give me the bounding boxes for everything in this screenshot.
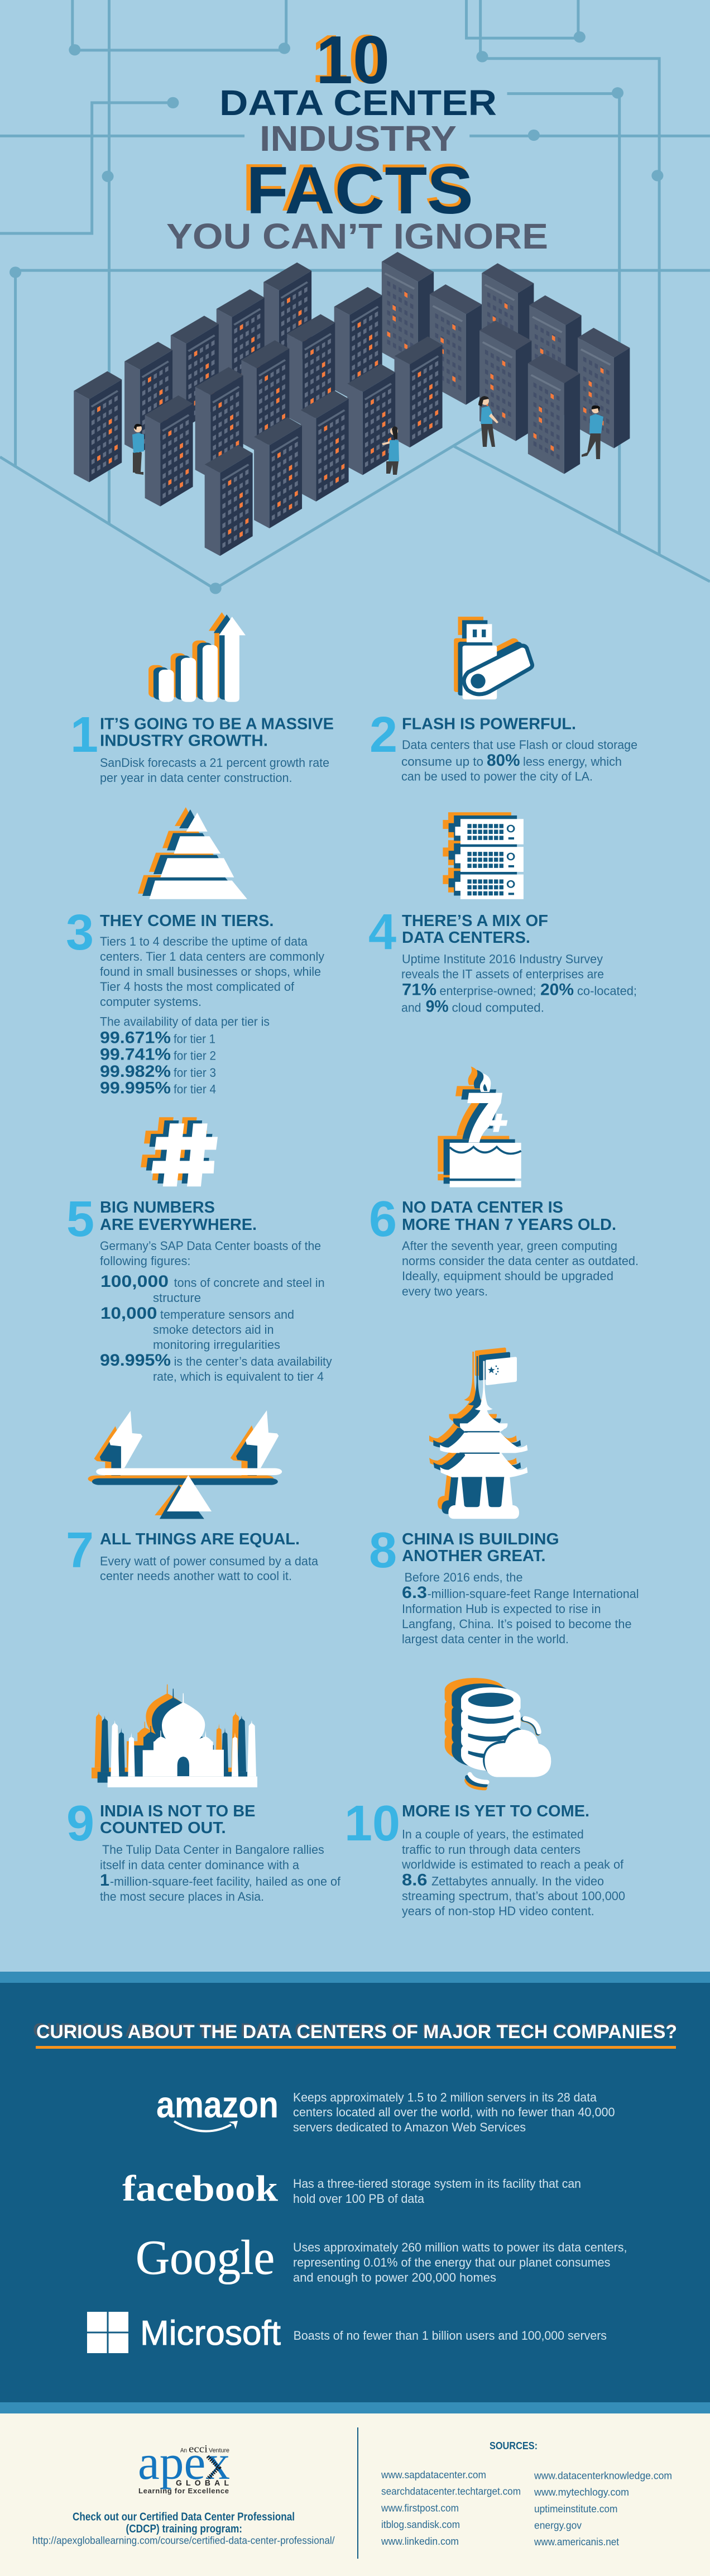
title: 10: 10 bbox=[311, 21, 385, 97]
amazon text bbox=[293, 2090, 615, 2134]
fact 9 bbox=[66, 1685, 341, 1904]
call to action bbox=[32, 2511, 335, 2546]
heading 1: INDUSTRY GROWTH. bbox=[100, 732, 268, 750]
body 4: enterprise-owned; bbox=[440, 984, 536, 998]
heading 6 bbox=[402, 1199, 616, 1234]
heading 2: FLASH IS POWERFUL. bbox=[402, 715, 576, 733]
heading 1: IT’S GOING TO BE A MASSIVE bbox=[100, 715, 334, 733]
number 9: 9 bbox=[66, 1796, 94, 1852]
logo: apex global: Learning for Excellence bbox=[138, 2487, 229, 2495]
title: industry: INDUSTRY bbox=[260, 118, 457, 159]
body 2: can be used to power the city of LA. bbox=[401, 770, 593, 783]
fact 10 bbox=[344, 1678, 625, 1918]
body 5: structure bbox=[153, 1291, 201, 1305]
number 10: 10 bbox=[344, 1796, 400, 1852]
body 10: Zettabytes annually. In the video bbox=[431, 1874, 604, 1888]
body 4: Uptime Institute 2016 Industry Survey bbox=[402, 952, 603, 966]
tier availability figures: for tier 4 bbox=[174, 1082, 216, 1096]
heading 8 bbox=[402, 1530, 559, 1565]
call to action: http://apexgloballearning.com/course/certified-data-center-professional/ bbox=[32, 2535, 335, 2546]
body 8 bbox=[402, 1571, 639, 1646]
title: data center: DATA CENTER bbox=[219, 83, 497, 123]
body 7: center needs another watt to cool it. bbox=[100, 1569, 292, 1583]
body 6: every two years. bbox=[402, 1285, 488, 1298]
body 3: found in small businesses or shops, while bbox=[100, 965, 321, 979]
fact 7 bbox=[66, 1410, 319, 1583]
body 8: Information Hub is expected to rise in bbox=[402, 1602, 601, 1616]
logo: apex global: ecci bbox=[189, 2443, 208, 2455]
body 2: Data centers that use Flash or cloud storage bbox=[402, 738, 637, 752]
tier availability figures: for tier 2 bbox=[174, 1048, 216, 1062]
body 9: The Tulip Data Center in Bangalore rallies bbox=[102, 1843, 324, 1857]
body 3: The availability of data per tier is bbox=[100, 1014, 270, 1029]
body 10: traffic to run through data centers bbox=[402, 1843, 581, 1857]
logo: google: Google bbox=[136, 2231, 275, 2285]
body 4: 9% bbox=[426, 997, 449, 1015]
sources list: left bbox=[381, 2469, 521, 2547]
icon: taj mahal bbox=[92, 1685, 257, 1787]
number 1: 1 bbox=[70, 707, 98, 763]
logo: amazon: amazon bbox=[156, 2084, 279, 2126]
call to action: (CDCP) training program: bbox=[126, 2523, 242, 2535]
heading 8: CHINA IS BUILDING bbox=[402, 1530, 559, 1548]
heading 4: THERE’S A MIX OF bbox=[402, 912, 548, 930]
number 3: 3 bbox=[66, 905, 94, 961]
number 8: 8 bbox=[369, 1523, 397, 1578]
google text bbox=[293, 2240, 627, 2284]
body 4 bbox=[401, 952, 637, 1015]
sources list: right: energy.gov bbox=[534, 2520, 582, 2531]
heading 4: DATA CENTERS. bbox=[402, 929, 530, 947]
heading 1 bbox=[100, 715, 334, 750]
sources list: right: www.americanis.net bbox=[534, 2536, 619, 2548]
body 5: tons of concrete and steel in bbox=[174, 1276, 325, 1290]
sources list: left: searchdatacenter.techtarget.com bbox=[381, 2486, 521, 2497]
body 3: Tier 4 hosts the most complicated of bbox=[100, 980, 295, 994]
body 10: years of non-stop HD video content. bbox=[402, 1904, 594, 1918]
title bbox=[166, 21, 548, 256]
body 9: 1 bbox=[100, 1871, 109, 1890]
body 8: Langfang, China. It’s poised to become the bbox=[402, 1617, 632, 1631]
tier availability figures bbox=[100, 1029, 216, 1098]
tier availability figures: 99.982% bbox=[100, 1062, 171, 1081]
body 7 bbox=[100, 1554, 319, 1583]
sources list: right: www.datacenterknowledge.com bbox=[534, 2470, 672, 2481]
body 10 bbox=[401, 1828, 625, 1918]
fact 1 bbox=[70, 612, 334, 785]
logo: apex global: apex bbox=[138, 2436, 230, 2490]
body 10: worldwide is estimated to reach a peak of bbox=[401, 1858, 624, 1872]
logo: apex global: An bbox=[180, 2448, 187, 2454]
body 5: 99.995% bbox=[100, 1351, 171, 1370]
heading 10: MORE IS YET TO COME. bbox=[402, 1802, 589, 1820]
title: facts: FACTS bbox=[242, 150, 472, 225]
tier availability figures: for tier 3 bbox=[174, 1066, 216, 1080]
fact 4 bbox=[368, 812, 637, 1015]
title: facts: FACTS bbox=[246, 153, 473, 228]
google text: Uses approximately 260 million watts to power its data centers, bbox=[293, 2240, 627, 2254]
body 4: and bbox=[401, 1000, 421, 1014]
amazon text: Keeps approximately 1.5 to 2 million servers in its 28 data bbox=[293, 2090, 597, 2104]
body 2: 80% bbox=[487, 751, 520, 770]
body 1: per year in data center construction. bbox=[100, 771, 292, 785]
icon: usb flash drive bbox=[454, 617, 532, 699]
heading 9 bbox=[100, 1802, 256, 1837]
body 5: 10,000 bbox=[100, 1304, 157, 1323]
sources list: right: www.mytechlogy.com bbox=[534, 2487, 629, 2498]
body 3: computer systems. bbox=[100, 995, 202, 1009]
body 8: 6.3 bbox=[402, 1583, 427, 1602]
body 2 bbox=[401, 738, 637, 783]
body 2: less energy, which bbox=[523, 755, 622, 769]
body 4: co-located; bbox=[577, 984, 637, 998]
google text: and enough to power 200,000 homes bbox=[293, 2270, 496, 2284]
number 2: 2 bbox=[370, 707, 397, 763]
body 3: centers. Tier 1 data centers are commonly bbox=[100, 950, 324, 963]
facebook text: hold over 100 PB of data bbox=[293, 2192, 425, 2206]
body 4: reveals the IT assets of enterprises are bbox=[401, 967, 604, 981]
tier availability figures: 99.741% bbox=[100, 1045, 171, 1063]
logo: microsoft bbox=[87, 2312, 281, 2353]
body 6 bbox=[402, 1239, 639, 1298]
hero: circuit lines bbox=[0, 0, 710, 594]
microsoft text: Boasts of no fewer than 1 billion users and 100,000 servers bbox=[294, 2329, 607, 2343]
body 9: itself in data center dominance with a bbox=[100, 1858, 300, 1872]
icon: birthday cake with 7 plus candle bbox=[438, 1066, 521, 1187]
fact 3 bbox=[66, 807, 324, 1098]
body 6: Ideally, equipment should be upgraded bbox=[402, 1269, 613, 1283]
heading 5 bbox=[100, 1199, 257, 1234]
google text: representing 0.01% of the energy that our planet consumes bbox=[293, 2255, 611, 2269]
tier availability figures: for tier 1 bbox=[174, 1032, 215, 1046]
icon: chinese pagoda with flag bbox=[429, 1348, 527, 1519]
fact 8 bbox=[369, 1348, 639, 1646]
body 3 bbox=[100, 934, 324, 1029]
sources list: right: uptimeinstitute.com bbox=[534, 2503, 617, 2515]
body 5: temperature sensors and bbox=[160, 1308, 294, 1322]
sources list: left: itblog.sandisk.com bbox=[381, 2519, 460, 2530]
amazon text: centers located all over the world, with no fewer than 40,000 bbox=[293, 2105, 615, 2119]
fact 6 bbox=[369, 1066, 639, 1298]
body 5 bbox=[100, 1239, 332, 1384]
person 2 bbox=[382, 426, 399, 475]
body 9: the most secure places in Asia. bbox=[100, 1890, 264, 1904]
body 9 bbox=[100, 1843, 341, 1904]
body 4: 20% bbox=[540, 980, 574, 999]
number 5: 5 bbox=[66, 1191, 94, 1247]
illustration: server racks bbox=[74, 252, 630, 556]
icon: bar chart with arrow bbox=[148, 612, 246, 702]
fact 2 bbox=[370, 617, 637, 783]
body 6: After the seventh year, green computing bbox=[402, 1239, 617, 1253]
body 5: smoke detectors aid in bbox=[153, 1323, 274, 1337]
body 1 bbox=[100, 756, 329, 785]
amazon text: servers dedicated to Amazon Web Services bbox=[293, 2120, 526, 2134]
person 4 bbox=[582, 406, 603, 459]
sources list: left: www.linkedin.com bbox=[381, 2536, 459, 2547]
sources list: left: www.firstpost.com bbox=[381, 2502, 459, 2513]
sources list: right bbox=[534, 2470, 672, 2548]
body 6: norms consider the data center as outdated. bbox=[402, 1254, 639, 1268]
body 1: SanDisk forecasts a 21 percent growth rate bbox=[100, 756, 329, 770]
body 5: Germany’s SAP Data Center boasts of the bbox=[100, 1239, 321, 1253]
body 8: -million-square-feet Range International bbox=[428, 1587, 639, 1601]
heading 5: BIG NUMBERS bbox=[100, 1199, 215, 1217]
body 5: monitoring irregularities bbox=[153, 1338, 280, 1352]
body 10: 8.6 bbox=[402, 1871, 428, 1890]
facebook text: Has a three-tiered storage system in its facility that can bbox=[293, 2177, 581, 2191]
call to action: Check out our Certified Data Center Professional bbox=[73, 2511, 295, 2523]
panel heading: CURIOUS ABOUT THE DATA CENTERS OF MAJOR TECH COMPANIES? bbox=[33, 2020, 677, 2041]
logo: apex global: GLOBAL bbox=[176, 2478, 229, 2487]
panel heading: CURIOUS ABOUT THE DATA CENTERS OF MAJOR TECH COMPANIES? bbox=[36, 2021, 677, 2043]
panel: footer bbox=[0, 2413, 710, 2576]
tier availability figures: 99.671% bbox=[100, 1029, 171, 1047]
heading 6: MORE THAN 7 YEARS OLD. bbox=[402, 1216, 616, 1234]
number 7: 7 bbox=[66, 1523, 94, 1578]
heading 5: ARE EVERYWHERE. bbox=[100, 1216, 257, 1234]
number 6: 6 bbox=[369, 1191, 397, 1247]
heading 9: COUNTED OUT. bbox=[100, 1819, 226, 1837]
body 8: Before 2016 ends, the bbox=[404, 1571, 522, 1585]
panel: major tech companies bbox=[0, 1972, 710, 2413]
heading 8: ANOTHER GREAT. bbox=[402, 1547, 546, 1565]
logo: apex global: Venture bbox=[209, 2448, 229, 2454]
heading 4 bbox=[402, 912, 548, 947]
body 8: largest data center in the world. bbox=[402, 1632, 569, 1646]
heading 7: ALL THINGS ARE EQUAL. bbox=[100, 1530, 300, 1548]
body 9: -million-square-feet facility, hailed as one of bbox=[110, 1874, 341, 1888]
person 3 bbox=[478, 396, 498, 447]
body 7: Every watt of power consumed by a data bbox=[100, 1554, 319, 1568]
body 4: cloud computed. bbox=[452, 1000, 544, 1014]
body 10: In a couple of years, the estimated bbox=[402, 1828, 584, 1842]
body 5: 100,000 bbox=[100, 1272, 169, 1291]
body 2: consume up to bbox=[401, 755, 483, 769]
body 10: streaming spectrum, that’s about 100,000 bbox=[402, 1889, 625, 1903]
body 5: is the center’s data availability bbox=[174, 1354, 332, 1368]
icon: server rack bbox=[443, 812, 524, 899]
person 1 bbox=[132, 424, 144, 475]
fact 5 bbox=[66, 1117, 332, 1384]
icon: pyramid bbox=[138, 807, 247, 899]
heading 9: INDIA IS NOT TO BE bbox=[100, 1802, 256, 1820]
heading 6: NO DATA CENTER IS bbox=[402, 1199, 563, 1217]
heading 3: THEY COME IN TIERS. bbox=[100, 912, 274, 930]
icon: hash sign bbox=[141, 1117, 218, 1186]
body 5: following figures: bbox=[100, 1254, 191, 1268]
facebook text bbox=[293, 2177, 581, 2206]
number 4: 4 bbox=[368, 904, 396, 960]
body 5: rate, which is equivalent to tier 4 bbox=[153, 1370, 324, 1384]
icon: database and cloud bbox=[445, 1678, 551, 1788]
logo: facebook: facebook bbox=[122, 2168, 278, 2209]
sources list: left: www.sapdatacenter.com bbox=[381, 2469, 486, 2480]
title: you can't ignore: YOU CAN’T IGNORE bbox=[166, 216, 548, 256]
logo: microsoft: Microsoft bbox=[140, 2314, 281, 2353]
icon: balance scale with lightning bolts bbox=[88, 1410, 282, 1519]
body 4: 71% bbox=[402, 980, 436, 999]
title: 10: 10 bbox=[316, 22, 390, 98]
body 3: Tiers 1 to 4 describe the uptime of data bbox=[100, 934, 308, 948]
tier availability figures: 99.995% bbox=[100, 1079, 171, 1098]
sources heading: SOURCES: bbox=[490, 2440, 538, 2451]
